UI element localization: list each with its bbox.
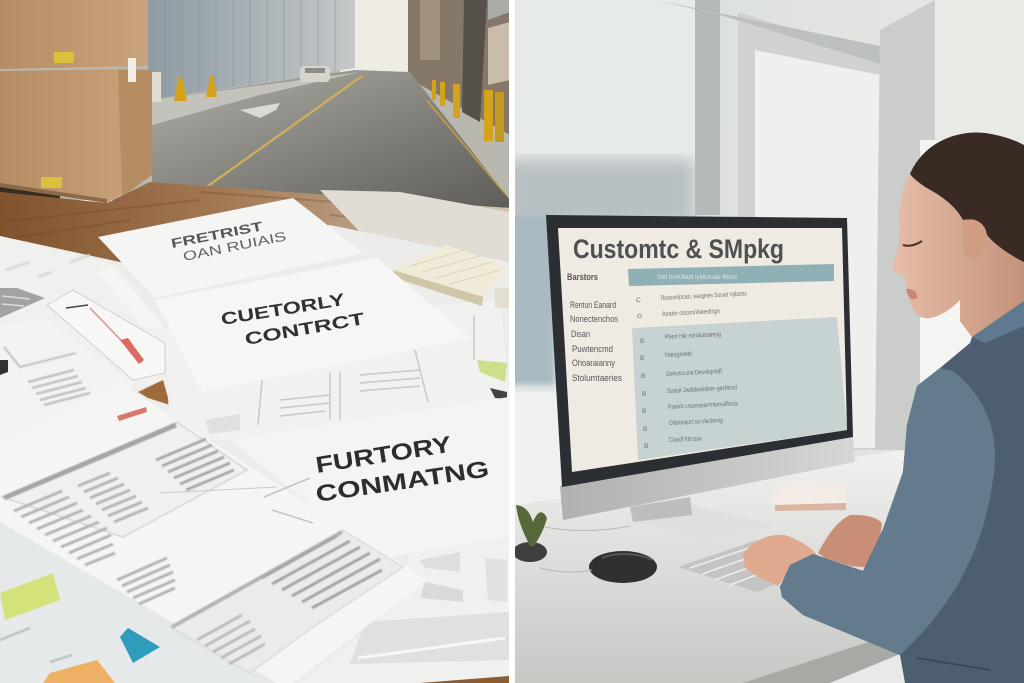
screen sidebar: Rentun Eanard bbox=[570, 300, 616, 310]
paper: Freight sheet: OAN RUIAIS bbox=[182, 228, 288, 264]
ear bbox=[963, 219, 987, 260]
wooden table bbox=[0, 182, 509, 683]
left top paper bbox=[0, 236, 8, 238]
screen table: SW hiviObult lyMotude Rmst bbox=[657, 274, 737, 281]
orange sticky note bbox=[43, 660, 115, 683]
paper base layer bbox=[0, 225, 509, 683]
main spreadsheet sheet bbox=[0, 384, 427, 683]
small white paper stack bbox=[152, 313, 164, 327]
hands bbox=[743, 535, 818, 586]
jacket collar bbox=[972, 301, 1024, 343]
window bbox=[515, 0, 701, 505]
screen sidebar: Nonectenchos bbox=[570, 314, 618, 324]
screen heading: Customtc & SMpkg bbox=[573, 234, 784, 264]
paper: Customs contract sheet: CONTRCT bbox=[243, 309, 367, 349]
keyboard on desk bbox=[393, 245, 509, 308]
paper: Freight sheet: FRETRIST bbox=[170, 218, 264, 251]
blue sticky note bbox=[120, 628, 160, 663]
plant bbox=[513, 505, 547, 562]
office room background bbox=[515, 0, 1024, 505]
stacked cardboard boxes bbox=[0, 0, 152, 203]
wood gap bbox=[138, 380, 170, 405]
back-right paper bbox=[320, 190, 509, 262]
screen table: B bbox=[644, 443, 648, 450]
screen table: Clasdf hbt paa bbox=[669, 435, 702, 444]
screen table: B bbox=[642, 408, 646, 415]
screen table: G bbox=[637, 313, 642, 320]
divider bbox=[509, 0, 515, 683]
jacket bbox=[780, 301, 1024, 683]
green sticky note bbox=[477, 360, 507, 382]
screen table: Soasit Jwdidowidner-gerMcoil bbox=[667, 384, 737, 395]
yellow bollards bbox=[174, 76, 504, 142]
screen sidebar: Stolumtaeries bbox=[572, 373, 622, 383]
lips bbox=[906, 289, 917, 299]
screen table: B bbox=[640, 355, 644, 362]
eye bbox=[903, 241, 922, 246]
clipboard with red pen bbox=[47, 290, 165, 380]
woman bbox=[743, 132, 1024, 683]
paper: Furtory sheet: FURTORY bbox=[314, 431, 453, 478]
lower table bbox=[117, 530, 403, 673]
screen table bbox=[628, 264, 847, 460]
lower left sheet with table bbox=[0, 320, 135, 445]
lower right sheets bbox=[420, 682, 424, 683]
screen sidebar: Barstors bbox=[567, 272, 598, 282]
paper: Furtory sheet: CONMATNG bbox=[314, 455, 491, 507]
screen table: B bbox=[641, 373, 645, 380]
paper: Furtory sheet bbox=[230, 397, 509, 560]
parked van bbox=[300, 66, 330, 82]
screen table: B bbox=[643, 426, 647, 433]
calculator bbox=[0, 288, 45, 318]
paper: Customs contract sheet bbox=[156, 258, 432, 380]
screen table: Asatin clsom/Aleedirgn bbox=[662, 308, 720, 318]
screen sidebar bbox=[567, 272, 622, 383]
neck and face bbox=[893, 174, 1024, 337]
screen table: Reason/pcasi, wargines Sosait Vpbzins bbox=[661, 290, 748, 302]
screen table: B bbox=[642, 391, 646, 398]
screen table: B bbox=[640, 338, 644, 345]
paper: Customs contract sheet: CUETORLY bbox=[220, 290, 347, 329]
keyboard bbox=[678, 540, 790, 592]
upper table bbox=[2, 422, 247, 565]
screen table: Pawick crsanswarrmtomalfinsia bbox=[668, 400, 738, 411]
hair bbox=[910, 132, 1024, 262]
warehouse wall bbox=[148, 0, 355, 100]
screen sidebar: Ohoaraianny bbox=[572, 358, 615, 368]
lower left sheets bbox=[0, 522, 277, 683]
window frames bbox=[695, 0, 720, 215]
screen table: Gelvcticcine Desvkqmidf bbox=[666, 368, 722, 378]
notepad bbox=[768, 481, 846, 511]
screen table: C bbox=[636, 297, 641, 304]
panel: warehouse and paperwork bbox=[0, 0, 510, 683]
warehouse background bbox=[0, 0, 510, 208]
document pile bbox=[0, 190, 509, 683]
jacket sleeve bbox=[780, 368, 995, 655]
mouse bbox=[589, 551, 657, 583]
screen sidebar: Disan bbox=[571, 329, 590, 339]
screen table: Oidoteiqurt sul vlecbenig bbox=[669, 417, 723, 427]
monitor bbox=[546, 215, 855, 520]
screen sidebar: Puwtencmd bbox=[572, 344, 613, 354]
loading floor bbox=[152, 70, 510, 208]
panel: office monitor scene bbox=[505, 0, 1024, 683]
screen table: Naisgmeel bbox=[665, 351, 693, 359]
paper: Freight sheet bbox=[98, 198, 363, 298]
desk bbox=[515, 450, 905, 683]
screen table: Pherr Hie rsinduirsaiesg bbox=[665, 331, 721, 341]
monitor stand bbox=[630, 497, 697, 522]
loading dock building bbox=[408, 0, 510, 135]
centre lower sheets bbox=[168, 398, 170, 405]
yellow sticky note bbox=[0, 573, 60, 620]
